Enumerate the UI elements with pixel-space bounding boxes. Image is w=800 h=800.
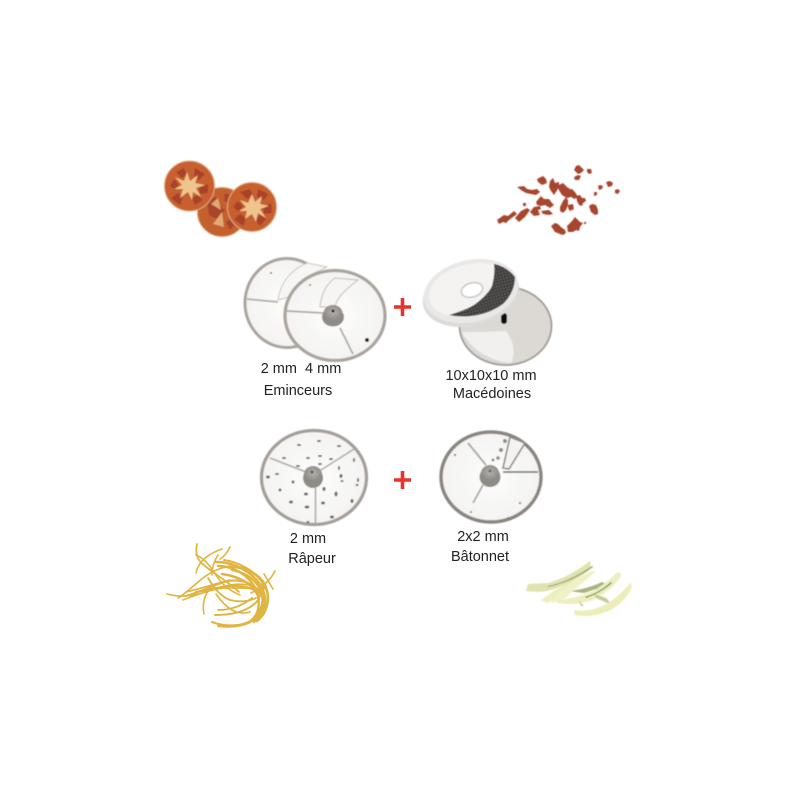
label: 2x2 mm Bâtonnet: Bâtonnet xyxy=(451,549,509,565)
tomato slice left xyxy=(164,161,214,211)
disc: Bâtonnet xyxy=(441,432,541,522)
tomato slice middle xyxy=(198,188,246,236)
label: 2 mm Râpeur: 2 mm xyxy=(290,531,326,547)
disc: Macédoines xyxy=(416,250,552,365)
zucchini sticks illustration xyxy=(526,561,632,616)
label: 10x10x10 mm Macédoines: 10x10x10 mm xyxy=(445,368,537,384)
disc: Eminceurs 2 mm (back) xyxy=(245,258,329,348)
plus sign top xyxy=(394,298,411,316)
diced tomato illustration xyxy=(497,165,620,235)
label: 2 mm Râpeur: Râpeur xyxy=(288,551,336,567)
label: 2x2 mm Bâtonnet xyxy=(451,529,509,565)
spaghetti vegetable strands illustration xyxy=(167,544,275,627)
plus sign bottom xyxy=(394,471,411,489)
lower disc xyxy=(460,287,552,365)
disc: Râpeur xyxy=(262,430,366,524)
label: 2 mm 4 mm Eminceurs: Eminceurs xyxy=(264,383,332,399)
label: 10x10x10 mm Macédoines xyxy=(445,368,537,402)
label: 2 mm 4 mm Eminceurs xyxy=(261,361,341,399)
label: 2 mm Râpeur xyxy=(288,531,336,567)
tomato slices illustration xyxy=(164,161,276,236)
disc: Eminceurs 4 mm (front) xyxy=(285,270,385,360)
label: 2x2 mm Bâtonnet: 2x2 mm xyxy=(457,529,509,545)
label: 10x10x10 mm Macédoines: Macédoines xyxy=(453,386,531,402)
label: 2 mm 4 mm Eminceurs: 2 mm 4 mm xyxy=(261,361,341,377)
upper ring with grid xyxy=(416,250,526,336)
tomato slice right xyxy=(228,182,276,232)
